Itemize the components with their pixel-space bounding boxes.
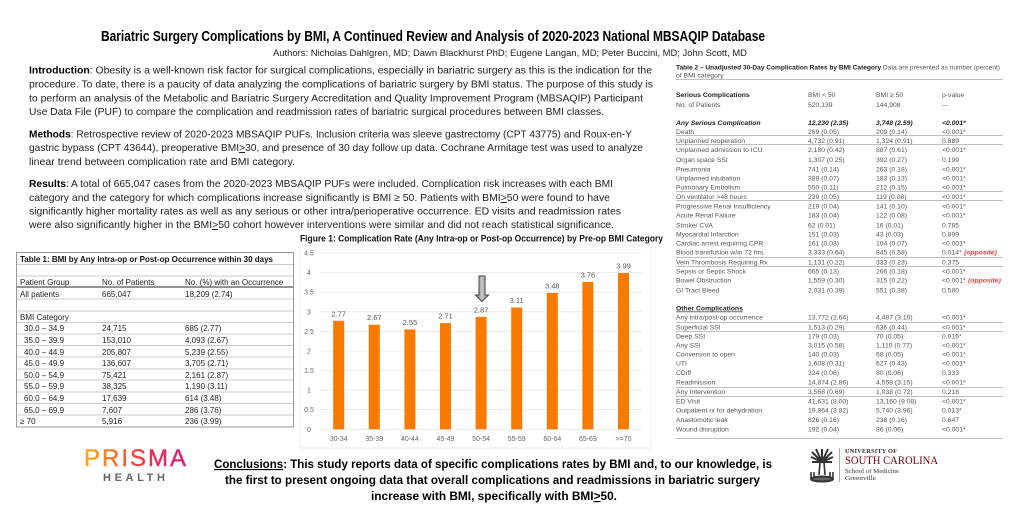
table 2 other complications rows: 0.218 xyxy=(942,389,959,396)
table 1 rows: 286 (3.76) xyxy=(185,406,222,415)
table 2 serious complications rows: 0.199 xyxy=(942,157,959,164)
table 2 other complications rows: 1,513 (0.29) xyxy=(808,324,845,332)
y axis labels: 4.5 xyxy=(304,250,314,258)
table 2 other complications rows: Deep SSI xyxy=(676,334,705,340)
table 2 other complications rows: 140 (0.03) xyxy=(808,352,839,358)
table 2 serious complications rows: 239 (0.05) xyxy=(808,194,839,201)
y axis labels: 2 xyxy=(307,348,311,356)
table 2 serious complications rows: <0.001* xyxy=(942,147,966,154)
table 2 serious complications rows: Unplanned reoperation xyxy=(676,138,745,145)
data labels: 3.48 xyxy=(545,282,560,290)
table 2 serious complications rows: Progressive Renal Insufficiency xyxy=(676,204,771,210)
table 2 serious complications rows: <0.001* xyxy=(942,212,966,220)
text block: introduction: Introduction: Obesity is a well-known risk factor for surgical complications, especially in bariatric surgery as this is the indication for the xyxy=(29,64,652,76)
table 1 rows: 38,325 xyxy=(102,382,127,391)
text block: methods xyxy=(29,128,643,168)
table 2 serious complications rows: 665 (0.13) xyxy=(808,268,839,276)
table 2 other complications rows: 13,160 (9.08) xyxy=(876,398,916,406)
table 2 other complications rows: Any SSI xyxy=(676,342,701,350)
data labels: 2.77 xyxy=(331,309,346,318)
table 2 serious complications rows: Stroke/ CVA xyxy=(676,222,713,230)
x axis labels: 55-59 xyxy=(508,436,526,443)
y axis labels: 1.5 xyxy=(304,368,314,375)
x axis labels: 30-34 xyxy=(330,436,348,443)
table 2 other complications rows: 70 (0.05) xyxy=(876,334,903,340)
x axis labels: 35-39 xyxy=(365,436,383,443)
conclusions xyxy=(214,459,772,503)
figure 1 heading: Figure 1: Complication Rate (Any Intra-op or Post-op Occurrence) by Pre-op BMI Category xyxy=(300,234,664,244)
y axis labels xyxy=(304,250,314,434)
table 2 serious complications rows: Myocardial Infarction xyxy=(676,232,739,238)
table 2 serious complications rows: 12,230 (2.35) xyxy=(808,120,849,127)
table 1 rows: 136,607 xyxy=(102,359,131,368)
table 2 serious complications rows: Acute Renal Failure xyxy=(676,212,736,220)
table 2 other complications rows: Outpatient rx for dehydration xyxy=(676,408,762,414)
data labels: 2.71 xyxy=(438,312,453,321)
table 1 rows: 3,705 (2.71) xyxy=(185,359,228,368)
table 1 column headers: Patient Group xyxy=(20,278,70,287)
y axis labels: 3.5 xyxy=(304,290,314,297)
table 2 other complications rows: 238 (0.16) xyxy=(876,417,907,424)
table 2 other complications rows: Any Intervention xyxy=(676,389,725,396)
table 2 other complications rows: <0.001* xyxy=(942,380,966,386)
table 2 other complications rows: <0.001* xyxy=(942,352,966,358)
table 2 serious complications rows: 212 (0.15) xyxy=(876,184,907,192)
y axis labels: 2.5 xyxy=(304,329,314,336)
table 2 other complications rows: 636 (0.44) xyxy=(876,324,907,332)
table 2 serious complications rows: 0.889 xyxy=(942,138,959,145)
table 2 heading: of BMI category xyxy=(676,72,724,80)
table 1 rows: 24,715 xyxy=(102,324,127,333)
table 2 heading: Table 2 – Unadjusted 30-Day Complication Rates by BMI Category Data are presented as number (percent) xyxy=(676,64,1000,72)
logo: Prisma Health: PRISMA xyxy=(84,445,186,472)
panel: table 2 xyxy=(675,64,1003,438)
table 2 serious complications rows: 3,748 (2.59) xyxy=(876,120,913,127)
table 2 other complications rows: 192 (0.04) xyxy=(808,426,839,434)
table 1 rows: 50.0 – 54.9 xyxy=(24,371,65,380)
table 1 rows: All patients xyxy=(20,290,59,299)
bars xyxy=(333,273,629,429)
text block: introduction: Use Data File (PUF) to compare the complication and readmission rates of bariatric surgical procedures between BMI classes. xyxy=(29,106,604,118)
table 2 serious complications rows: <0.001* xyxy=(942,166,966,174)
table 2 serious complications rows: <0.001* xyxy=(942,204,966,210)
table 2 serious complications rows: Bowel Obstruction xyxy=(676,278,731,284)
table 1 rows: 205,807 xyxy=(102,348,131,357)
text block: results: Results: A total of 665,047 cases from the 2020-2023 MBSAQIP PUFs were included. Complication risk increases with each BMI xyxy=(29,178,613,190)
table 2 other complications rows: Wound disruption xyxy=(676,426,729,434)
table 2 serious complications rows: 0.375 xyxy=(942,260,959,266)
x axis labels: 45-49 xyxy=(437,436,455,443)
table 1 rows: 17,639 xyxy=(102,394,127,403)
data labels: 2.67 xyxy=(367,313,382,322)
table 2 other complications rows: <0.001* xyxy=(942,398,966,406)
table 2 other complications rows: 0.333 xyxy=(942,370,959,377)
text block: results: category and the category for which complications increase significantly is BMI ≥ 50. Patients with BMI>50 were found to have xyxy=(29,192,610,204)
table 2 other complications rows: <0.001* xyxy=(942,426,966,434)
table 2 other complications rows: 1,110 (0.77) xyxy=(876,342,912,350)
table 2 serious complications rows: 119 (0.08) xyxy=(876,194,906,201)
table 1 rows: 2,161 (2.87) xyxy=(185,371,228,380)
table 2 other complications rows xyxy=(676,314,966,434)
conclusions: Conclusions: This study reports data of specific complications rates by BMI and, to our knowledge, is xyxy=(214,459,772,471)
table 2 other complications rows: 179 (0.03) xyxy=(808,334,839,340)
x axis labels: 60-64 xyxy=(543,436,561,443)
table 2 serious complications rows: GI Tract Bleed xyxy=(676,288,720,294)
table 2 serious complications rows: 551 (0.38) xyxy=(876,288,907,294)
table 2 serious complications rows: Any Serious Complication xyxy=(675,120,761,127)
table 2 other complications rows: 1,608 (0.31) xyxy=(808,360,845,368)
table 2 serious complications rows: <0.001* xyxy=(942,194,966,201)
authors: Authors: Nicholas Dahlgren, MD; Dawn Blackhurst PhD; Eugene Langan, MD; Peter Buccini, MD; John Scott, MD xyxy=(273,48,747,59)
table 1 rows: 65.0 – 69.9 xyxy=(24,406,65,415)
table 2 serious complications rows: 392 (0.27) xyxy=(876,157,907,164)
table 1 heading: Table 1: BMI by Any Intra-op or Post-op Occurrence within 30 days xyxy=(20,254,273,264)
table 2 serious complications rows xyxy=(675,102,1002,294)
data labels xyxy=(331,262,631,327)
logo: University of South Carolina School of Medicine Greenville: UNIVERSITY OF xyxy=(845,448,897,455)
text block: results: were also significantly higher in the BMI>50 cohort however interventions were similar and did not reach statistical significance. xyxy=(28,219,614,231)
table 2 other complications rows: <0.001* xyxy=(942,360,966,368)
table 2 serious complications rows: <0.001* xyxy=(942,268,966,276)
table 2 serious complications rows: Pneumonia xyxy=(676,166,711,174)
logo: University of South Carolina School of Medicine Greenville: SOUTH CAROLINA xyxy=(845,453,938,467)
table 2 other complications rows: ED Visit xyxy=(676,398,700,406)
table 2 serious complications rows: 161 (0.03) xyxy=(808,240,839,248)
title: Bariatric Surgery Complications by BMI, A Continued Review and Analysis of 2020-2023 National MBSAQIP Database xyxy=(101,29,765,45)
table 2 serious complications rows: 269 (0.05) xyxy=(808,129,839,136)
table 2 serious complications rows: On ventilator >48 hours xyxy=(676,194,747,201)
table 2 other complications rows: UTI xyxy=(676,360,687,368)
table 2 serious complications rows: Cardiac arrest requiring CPR xyxy=(676,240,763,248)
table 2 serious complications rows: <0.001* xyxy=(942,278,966,284)
table 1 column headers: No. of Patients xyxy=(102,278,154,287)
table 2 other complications rows: 324 (0.06) xyxy=(808,370,839,377)
logo: Prisma Health: HEALTH xyxy=(103,472,165,484)
table 2 serious complications rows: 389 (0.07) xyxy=(808,176,839,182)
arrow: BMI 50 threshold xyxy=(476,276,488,302)
table 2 column headers: BMI < 50 xyxy=(808,92,836,99)
table 2 serious complications rows: 2,180 (0.42) xyxy=(808,147,845,154)
table 2 other complications rows: Readmission xyxy=(676,380,716,386)
table 2 serious complications rows: 151 (0.03) xyxy=(808,232,839,238)
table 2 serious complications rows: 3,333 (0.64) xyxy=(808,250,845,256)
table 2 serious complications rows: (opposite) xyxy=(968,278,1002,284)
data labels: 3.11 xyxy=(510,296,524,305)
table 1 rows: 665,047 xyxy=(102,290,131,299)
table 2 serious complications rows: 16 (0.01) xyxy=(876,222,903,230)
table 2 other complications rows: CDiff xyxy=(676,370,691,377)
table 2 serious complications rows: <0.001* xyxy=(942,120,966,127)
table 2 serious complications rows: --- xyxy=(942,102,949,109)
table 2 serious complications rows: Organ space SSI xyxy=(676,157,728,164)
table 1 rows: 35.0 – 39.9 xyxy=(24,336,65,345)
y axis labels: 1 xyxy=(307,388,311,395)
table 1 rows: 18,209 (2.74) xyxy=(185,290,233,299)
table 2 serious complications rows: 141 (0.10) xyxy=(876,204,907,210)
table 1 rows: 236 (3.99) xyxy=(185,417,222,426)
table 2 serious complications rows: 104 (0.07) xyxy=(876,240,907,248)
table 1 rows: 60.0 – 64.9 xyxy=(24,394,65,403)
logo: University of South Carolina School of Medicine Greenville: School of Medicine xyxy=(845,468,899,475)
table 2 other complications rows: 86 (0.06) xyxy=(876,426,903,434)
x axis labels: 50-54 xyxy=(472,436,490,443)
table 2 serious complications rows: <0.001* xyxy=(942,176,966,182)
table 2 other complications rows: Anastomotic leak xyxy=(676,417,728,424)
conclusions: the first to present ongoing data that overall complications and readmissions in bariatric surgery xyxy=(225,475,761,487)
table 1 rows: 5,239 (2.55) xyxy=(185,348,228,357)
panel: table 1 xyxy=(16,252,294,427)
table 2 column headers: p-value xyxy=(942,92,965,99)
conclusions: increase with BMI, specifically with BMI >50. xyxy=(371,491,617,503)
table 2 serious complications rows: 1,559 (0.30) xyxy=(808,278,845,284)
x axis labels: 65-69 xyxy=(579,436,597,443)
logo: University of South Carolina School of Medicine Greenville xyxy=(811,448,938,482)
table 2 serious complications rows: 1,324 (0.91) xyxy=(876,138,913,145)
table 2 other complications rows: 3,568 (0.69) xyxy=(808,389,845,396)
table 2 serious complications rows: 1,307 (0.25) xyxy=(808,157,845,164)
table 2 serious complications rows: <0.001* xyxy=(942,129,966,136)
data labels: 3.76 xyxy=(581,270,595,280)
table 1 rows xyxy=(20,290,233,426)
table 2 other complications rows: 14,874 (2.86) xyxy=(808,380,848,386)
table 2 serious complications rows: 315 (0.22) xyxy=(876,278,907,284)
icon: palmetto tree seal xyxy=(811,449,833,482)
table 2 serious complications rows: 520,139 xyxy=(808,102,833,109)
table 2 other complications rows: 4,558 (3.15) xyxy=(876,380,913,386)
table 2 serious complications rows: 0.580 xyxy=(942,288,959,294)
y axis labels: 0.5 xyxy=(304,407,314,414)
table 2 serious complications rows: 887 (0.61) xyxy=(876,147,907,154)
y axis labels: 0 xyxy=(307,427,311,434)
table 2 serious complications rows: 0.014* xyxy=(942,250,962,256)
table 2 serious complications rows: 266 (0.18) xyxy=(876,268,907,276)
table 1 rows: 75,421 xyxy=(102,371,127,380)
table 2 other complications rows: 13,772 (2.64) xyxy=(808,314,848,322)
table 1 rows: 30.0 – 34.9 xyxy=(24,324,65,333)
table 2 other complications rows: 627 (0.43) xyxy=(876,360,907,368)
table 2 serious complications rows: 845 (0.58) xyxy=(876,250,907,256)
table 2 other complications rows: 41,631 (8.00) xyxy=(808,398,848,406)
table 1 rows: 614 (3.48) xyxy=(185,394,222,403)
table 1 rows: BMI Category xyxy=(20,313,69,322)
table 2 serious complications rows: 0.899 xyxy=(942,232,959,238)
table 2 serious complications rows: 333 (0.23) xyxy=(876,260,907,266)
table 2 other complications rows: <0.001* xyxy=(942,314,966,322)
text block: introduction xyxy=(29,64,653,118)
data labels: 3.99 xyxy=(616,262,631,270)
table 1 rows: ≥ 70 xyxy=(20,417,36,426)
table 2 other complications rows: <0.001* xyxy=(942,324,966,332)
table 2 other complications rows: <0.001* xyxy=(942,342,966,350)
table 2 serious complications rows: 219 (0.04) xyxy=(808,204,839,210)
table 2 serious complications rows: Vein Thrombosis Requiring Rx xyxy=(676,260,768,266)
y axis labels: 4 xyxy=(307,270,311,277)
table 2 serious complications rows: No. of Patients xyxy=(676,102,721,109)
table 2 serious complications rows: 1,131 (0.22) xyxy=(808,260,845,266)
table 1 rows: 5,916 xyxy=(102,417,123,426)
x axis labels xyxy=(330,436,632,443)
table 1 rows: 7,607 xyxy=(102,406,123,415)
table 2 other complications rows: 0.013* xyxy=(942,408,962,414)
table 1 rows: 1,190 (3.11) xyxy=(185,382,228,391)
table 2 column headers: BMI ≥ 50 xyxy=(876,92,903,99)
table 2 other complications heading: Other Complications xyxy=(676,306,743,312)
table 2 other complications rows: 68 (0.05) xyxy=(876,352,903,358)
table 2 other complications rows: 826 (0.16) xyxy=(808,417,839,424)
table 2 serious complications rows: 43 (0.03) xyxy=(876,232,903,238)
table 2 other complications rows: 1,038 (0.72) xyxy=(876,389,913,396)
text block: methods: linear trend between complication rate and BMI category. xyxy=(29,156,295,168)
table 1 rows: 153,010 xyxy=(102,336,131,345)
text block: introduction: procedure. To date, there is a paucity of data analyzing the complications of bariatric surgery by BMI status. The purpose of this study is xyxy=(29,78,653,90)
data labels: 2.55 xyxy=(403,318,417,327)
y axis labels: 3 xyxy=(307,309,311,316)
table 2 serious complications rows: 62 (0.01) xyxy=(808,222,835,230)
x axis labels: 40-44 xyxy=(401,436,419,443)
table 2 serious complications rows: Pulmonary Embolism xyxy=(676,184,741,192)
text block: introduction: to perform an analysis of the Metabolic and Bariatric Surgery Accreditation and Quality Improvement Program (MBSAQIP) Participant xyxy=(29,92,643,104)
table 2 other complications rows: 4,487 (3.10) xyxy=(876,314,913,322)
table 2 serious complications rows: 4,732 (0.91) xyxy=(808,138,845,145)
table 2 other complications rows: Any intra/post-op occurrence xyxy=(676,314,763,322)
table 2 serious complications rows: Death xyxy=(676,129,694,136)
table 2 serious complications rows: 0.785 xyxy=(942,222,959,230)
table 2 serious complications rows: <0.001* xyxy=(942,240,966,248)
divider xyxy=(838,448,840,482)
table 2 other complications rows: 19,864 (3.82) xyxy=(808,408,848,414)
table 2 serious complications rows: 550 (0.11) xyxy=(808,184,838,192)
table 2 serious complications rows: Blood transfusion w/in 72 hrs. xyxy=(676,250,765,256)
table 2 column headers: Serious Complications xyxy=(676,92,750,99)
table 2 serious complications rows: 144,908 xyxy=(876,102,901,109)
table 2 other complications rows: 80 (0.06) xyxy=(876,370,903,377)
logo: University of South Carolina School of Medicine Greenville: Greenville xyxy=(845,475,876,482)
table 2 other complications rows: 3,015 (0.58) xyxy=(808,342,845,350)
table 2 other complications rows: Conversion to open xyxy=(676,352,735,358)
table 2 serious complications rows: Unplanned admission to ICU xyxy=(676,147,763,154)
text block: methods: gastric bypass (CPT 43644), preoperative BMI>30, and presence of 30 day follow up data. Cochrane Armitage test was used to analyze xyxy=(29,142,643,154)
table 2 other complications rows: 5,740 (3.96) xyxy=(876,408,913,414)
bar chart xyxy=(300,245,651,448)
table 2 serious complications rows: (opposite) xyxy=(964,250,998,256)
table 2 serious complications rows: 183 (0.04) xyxy=(808,212,839,220)
logo: Prisma Health xyxy=(84,445,186,484)
table 2 serious complications rows: 122 (0.08) xyxy=(876,212,907,220)
text block: results: significantly higher mortality rates as well as any serious or other intra/perioperative occurrence. ED visits and readmission rates xyxy=(29,206,621,218)
text block: results xyxy=(28,178,621,231)
table 2 serious complications rows: 209 (0.14) xyxy=(876,129,907,136)
table 2 serious complications rows: Unplanned intubation xyxy=(676,176,740,182)
table 1 rows: 55.0 – 59.9 xyxy=(24,382,65,391)
table 2 serious complications rows: 2,031 (0.39) xyxy=(808,288,845,294)
table 1 rows: 4,093 (2.67) xyxy=(185,336,228,345)
table 1 rows: 685 (2.77) xyxy=(185,324,222,333)
table 2 heading xyxy=(676,64,1000,80)
table 2 other complications rows: 0.016* xyxy=(942,334,962,340)
table 1 rows: 40.0 – 44.9 xyxy=(24,348,65,357)
text block: methods: Methods: Retrospective review of 2020-2023 MBSAQIP PUFs. Inclusion criteria was sleeve gastrectomy (CPT 43775) and Roux-en-Y xyxy=(29,128,632,140)
table 1 column headers: No. (%) with an Occurrence xyxy=(185,278,284,287)
x axis labels: >=70 xyxy=(616,436,632,443)
table 1 rows: 45.0 – 49.9 xyxy=(24,359,65,368)
table 2 serious complications rows: 263 (0.18) xyxy=(876,166,907,174)
data labels: 2.87 xyxy=(474,305,488,314)
table 2 serious complications rows: <0.001* xyxy=(942,184,966,192)
table 2 serious complications rows: 183 (0.13) xyxy=(876,176,907,182)
table 2 serious complications rows: 741 (0.14) xyxy=(808,166,839,174)
table 2 serious complications rows: Sepsis or Septic Shock xyxy=(676,268,746,276)
table 2 other complications rows: 0.647 xyxy=(942,417,959,424)
table 2 other complications rows: Superficial SSI xyxy=(676,324,721,332)
